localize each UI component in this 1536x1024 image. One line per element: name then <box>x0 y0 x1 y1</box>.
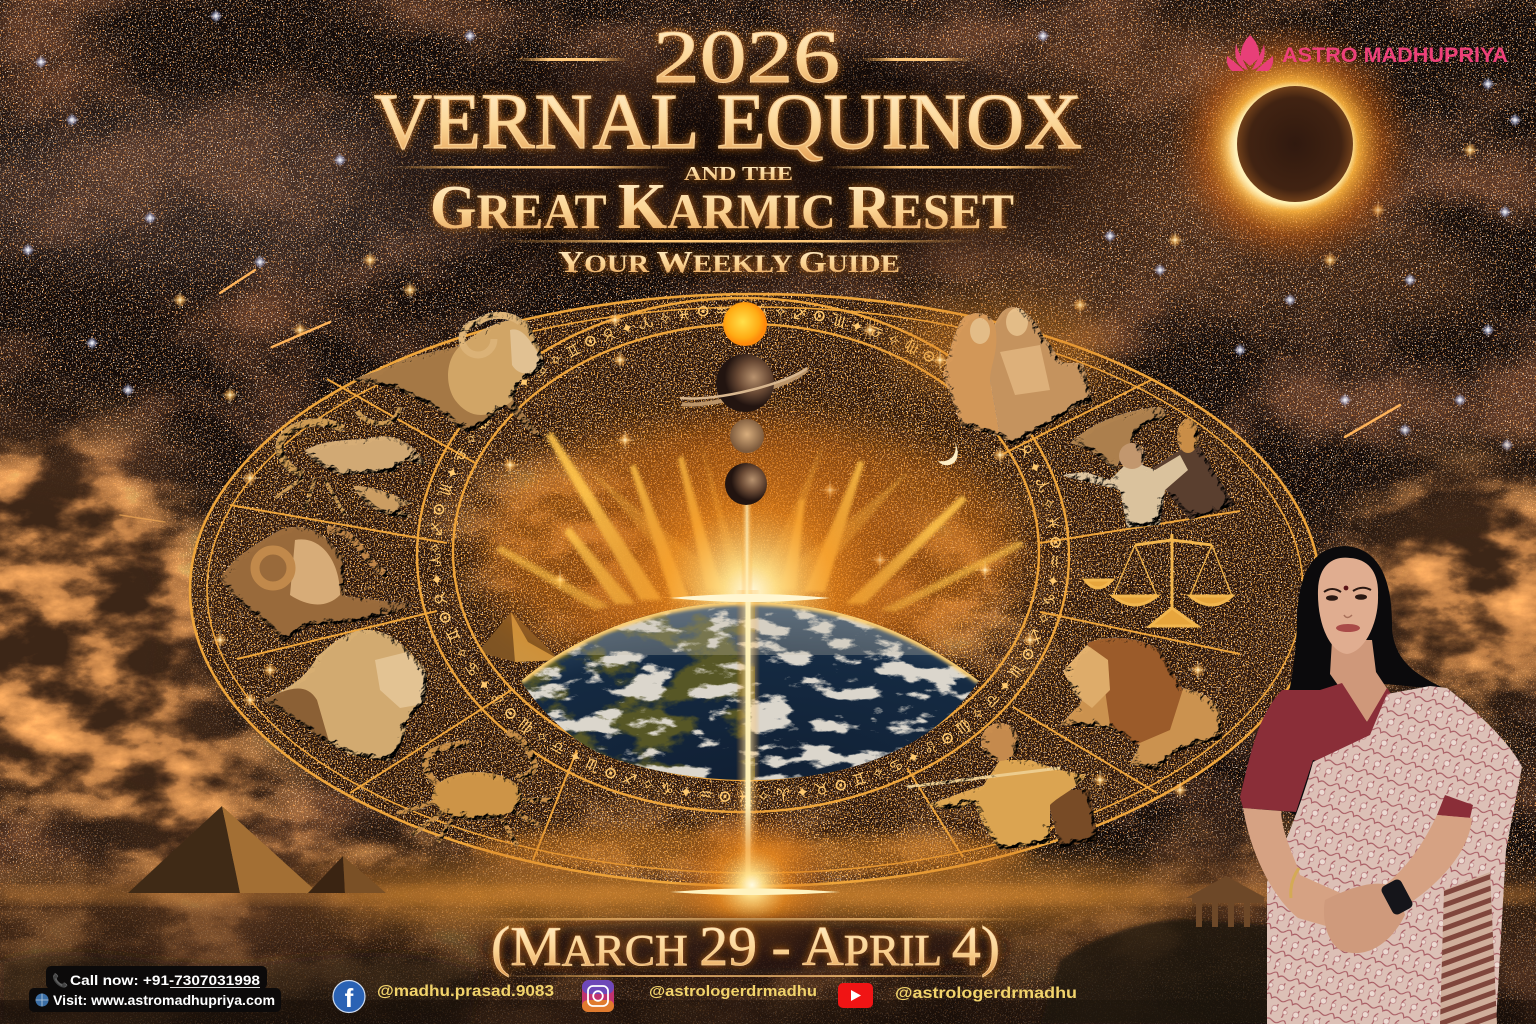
sun <box>723 302 767 346</box>
contact: phone: 📞 <box>52 972 69 988</box>
facial features <box>1324 586 1371 632</box>
zodiac figure: ram <box>353 315 545 439</box>
social: youtube handle: @astrologerdrmadhu <box>895 985 1077 1002</box>
title lines <box>392 58 1080 242</box>
right arm <box>1385 815 1472 908</box>
bright stars <box>21 9 1522 452</box>
presenter photo <box>1240 546 1522 1024</box>
shooting stars <box>120 270 1400 522</box>
social: facebook: f <box>345 983 354 1013</box>
zodiac figure: lion left <box>263 630 427 761</box>
golden star dust in wheel <box>211 295 1207 875</box>
zodiac figure: virgo and goat <box>1060 407 1235 528</box>
social: instagram handle: @astrologerdrmadhu <box>649 983 817 1000</box>
title: YOUR WEEKLY GUIDE <box>558 244 900 279</box>
logo: astro madhupriya: ASTRO MADHUPRIYA <box>1282 43 1508 67</box>
zodiac figure: goat head <box>220 527 413 643</box>
temple ruins <box>1186 876 1266 927</box>
logo: astro madhupriya <box>1227 35 1508 71</box>
face <box>1318 558 1378 654</box>
smartwatch <box>1380 878 1414 916</box>
sunrise glow <box>560 402 940 782</box>
zodiac wheel <box>188 292 1318 887</box>
pyramids <box>128 806 386 893</box>
zodiac ring glyphs: ♈ ✦ ♉ ⊙ ♊ ✧ ♋ ✦ ♌ ⊙ ♍ ✧ ♎ ✦ ♏ ⊙ ♐ ✧ ♑ ✦ ♒ ⊙ ♓ ✧ ♈ ✦ ♉ ⊙ ♊ ✧ ♋ ✦ ♌ ⊙ ♍ ✧ ♎ ✦ ♏ ⊙ ♐ ✧ ♑ ✦ ♒ ⊙ ♓ ✧ ♈ ✦ ♉ ⊙ ♊ ✧ ♋ ✦ ♌ ⊙ ♍ ✧ ♎ ✦ ♏ ⊙ ♐ ✧ ♑ ✦ ♒ ⊙ ♓ ✧ ♈ ✦ ♉ ⊙ ♊ ✧ ♋ ✦ ♌ ⊙ ♍ ✧ ♎ ✦ ♏ ⊙ ♐ ✧ <box>429 304 1061 802</box>
contact: phone <box>46 966 267 989</box>
saree <box>1267 686 1522 1024</box>
sun rays <box>496 432 1024 612</box>
zodiac figure: lion right <box>1060 638 1222 771</box>
inner pyramid <box>478 612 560 662</box>
zodiac figure: archer man <box>907 723 1098 850</box>
solar eclipse <box>1168 21 1418 271</box>
neck and chest <box>1330 640 1388 722</box>
hands <box>1324 884 1405 953</box>
saree pleats <box>1440 872 1497 1024</box>
social: instagram <box>582 980 614 1012</box>
contact: website <box>29 988 281 1012</box>
title: AND THE <box>684 163 793 185</box>
landscape horizon <box>0 850 1536 1024</box>
title: GREAT KARMIC RESET <box>430 170 1014 243</box>
crescent moon <box>938 442 958 465</box>
zodiac figure: gemini couple <box>943 307 1093 446</box>
date: (MARCH 29 - APRIL 4) <box>491 916 1000 978</box>
bracelet <box>1291 868 1299 898</box>
blouse right sleeve <box>1437 795 1473 818</box>
blouse <box>1240 683 1392 812</box>
earth <box>515 600 990 785</box>
contact: phone: Call now: +91-7307031998 <box>70 972 260 988</box>
social: facebook handle: @madhu.prasad.9083 <box>377 983 554 1000</box>
contact: website: Visit: www.astromadhupriya.com <box>53 992 275 1008</box>
hair <box>1277 546 1447 815</box>
clouds left and right <box>0 382 1536 1024</box>
icon: lotus <box>1227 35 1273 71</box>
title <box>374 16 1082 279</box>
title: 2026 <box>653 16 840 99</box>
zodiac figure: scorpion <box>275 407 427 518</box>
title: VERNAL EQUINOX <box>374 79 1082 166</box>
social: youtube <box>838 983 873 1008</box>
zodiac figure: libra scales <box>1085 534 1232 626</box>
light beam <box>670 490 840 965</box>
left arm <box>1243 808 1345 930</box>
zodiac figure: crab <box>397 732 553 846</box>
social: facebook <box>333 980 365 1013</box>
planet alignment <box>680 302 807 505</box>
